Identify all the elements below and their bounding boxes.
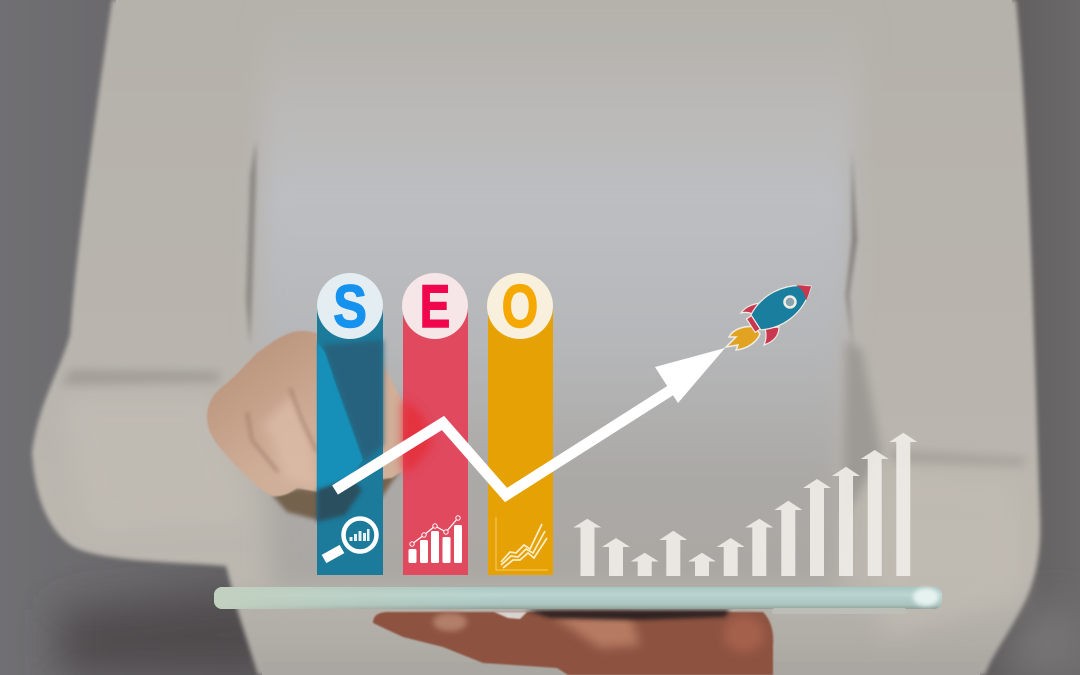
armpit crease, left (246, 140, 256, 345)
left cuff fold (62, 370, 220, 386)
finger creases (247, 388, 317, 472)
armpit crease, right (846, 150, 857, 350)
letter E: E (420, 274, 450, 341)
tablet left fade (214, 587, 942, 609)
column: S blue (317, 273, 383, 575)
hand holding the tablet (373, 610, 773, 675)
rocket fins (741, 303, 764, 320)
tablet (214, 587, 942, 614)
right forearm folds (890, 450, 1025, 466)
circle badge E (402, 273, 468, 339)
rocket flame (726, 326, 760, 350)
rocket neck (746, 315, 761, 332)
column: O amber (487, 273, 553, 575)
icon: rocket (726, 273, 820, 350)
sleeve cuff under the pointing hand (272, 470, 400, 520)
tablet corner highlight (913, 588, 939, 606)
tablet lower edge (772, 608, 907, 614)
pointing hand (207, 331, 432, 496)
circle badge O (487, 273, 553, 339)
chest and torso panel (258, 0, 868, 590)
shadow below tablet (525, 610, 730, 620)
finger highlights (433, 613, 467, 631)
knuckle light (262, 395, 318, 488)
icon: trend lines (496, 517, 548, 570)
rocket body (747, 273, 820, 336)
letter S: S (333, 273, 367, 340)
circle badge S (317, 273, 383, 339)
rocket window (784, 296, 796, 308)
left forearm light (60, 395, 250, 530)
right forearm light (880, 470, 1020, 640)
icon: bar chart with line (408, 516, 462, 563)
column: E red (402, 273, 468, 575)
bright finger seen through column (317, 342, 363, 492)
dark finger area (322, 340, 383, 462)
letter O: O (502, 273, 538, 340)
icon: magnifier with bars (324, 518, 376, 559)
zigzag growth arrow (335, 348, 725, 495)
fingertip glow through column (403, 398, 432, 472)
dark cuff through column (317, 478, 362, 522)
fold under chest, right (842, 340, 882, 520)
sweater top edge fill (116, 0, 1012, 8)
rocket nose (796, 279, 816, 300)
sweater bottom edge fill (262, 662, 980, 675)
rising arrows chart (573, 433, 917, 576)
